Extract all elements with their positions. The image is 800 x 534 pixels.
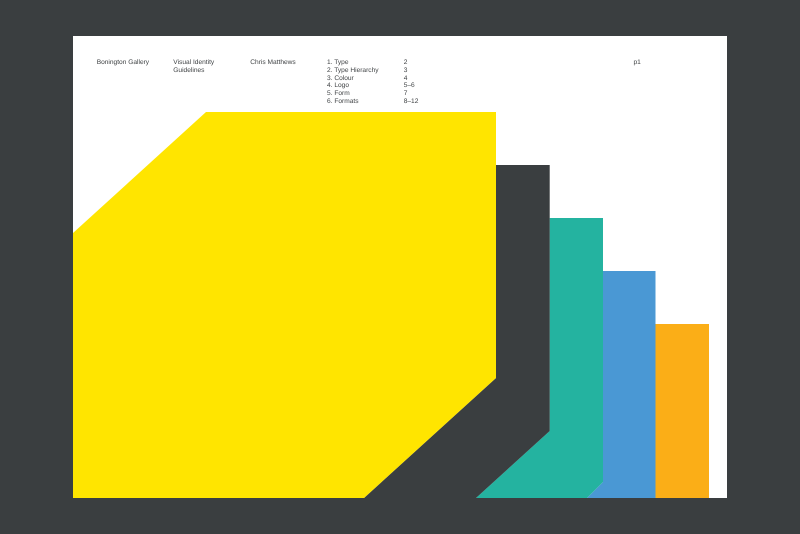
text: contents list: 5. Form xyxy=(327,90,350,97)
form: dark grey xyxy=(364,165,550,498)
text: contents page numbers: 7 xyxy=(404,90,407,97)
text: gallery name: Bonington Gallery xyxy=(97,59,149,66)
text: document title xyxy=(173,59,214,74)
text: contents list: 3. Colour xyxy=(327,75,354,82)
text: author: Chris Matthews xyxy=(250,59,296,66)
text: contents list: 2. Type Hierarchy xyxy=(327,67,379,74)
poster sheet xyxy=(73,36,727,498)
text: contents page numbers: 8–12 xyxy=(404,98,418,105)
form: blue xyxy=(587,271,656,498)
form: yellow xyxy=(73,112,496,498)
text: contents page numbers: 3 xyxy=(404,67,407,74)
text: contents list xyxy=(327,59,379,105)
text: document title: Guidelines xyxy=(173,67,204,74)
text: contents list: 1. Type xyxy=(327,59,349,66)
text: contents page numbers xyxy=(404,59,418,105)
form: teal xyxy=(476,218,603,498)
text: page number: p1 xyxy=(634,59,641,66)
text: contents page numbers: 4 xyxy=(404,75,407,82)
text: contents list: 6. Formats xyxy=(327,98,359,105)
form: orange xyxy=(655,324,709,498)
text: document title: Visual Identity xyxy=(173,59,214,66)
text: contents page numbers: 2 xyxy=(404,59,407,66)
text: contents page numbers: 5–6 xyxy=(404,82,415,89)
text: contents list: 4. Logo xyxy=(327,82,349,89)
